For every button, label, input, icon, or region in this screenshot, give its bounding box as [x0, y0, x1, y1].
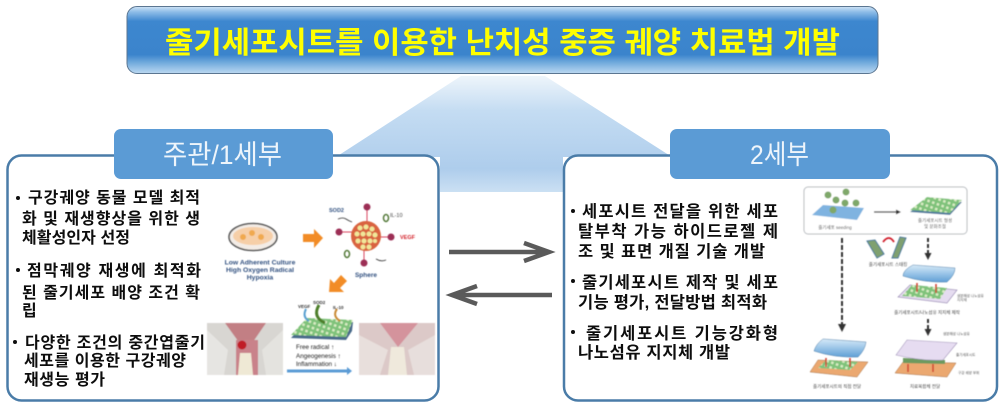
icon: stem cell sheet with factors: IL-10 [333, 305, 344, 310]
arrow: 1세부 to 2세부 [449, 243, 549, 261]
step: seeding to sheet box [804, 187, 967, 234]
step: composite delivery: 줄기세포시트 [956, 352, 976, 357]
label: culture conditions [225, 260, 296, 282]
step: seeding to sheet box: 줄기세포 seeding [818, 224, 852, 231]
step: hydrogel and nanofiber composite: 생분해성 나노섬유 [957, 293, 985, 298]
step: composite delivery [895, 331, 979, 390]
title banner [127, 6, 878, 74]
text block: 2세부 bullets: 세포시트 전달을 위한 세포 [582, 202, 778, 221]
arrow: 2세부 to 1세부 [452, 286, 552, 304]
step: hydrogel and nanofiber composite [894, 265, 985, 316]
step: seeding to sheet box: 및 분화조절 [924, 223, 946, 230]
label: effects: Angeogenesis ↑ [296, 353, 341, 360]
icon: stem cell sheet with factors: SOD2 [313, 300, 326, 305]
step: composite delivery: 구강 궤양 부위 [958, 370, 979, 375]
icon: stem cell sheet with factors [291, 300, 353, 340]
icon: sphere with factors: SOD2 [329, 208, 344, 214]
step: direct delivery: 줄기세포시트의 직접 전달 [813, 383, 861, 390]
text block: 2세부 bullets: 기능 평가, 전달방법 최적화 [578, 293, 767, 312]
icon: sphere with factors: VEGF [400, 235, 416, 241]
icon: sphere with factors: IL-10 [390, 213, 403, 219]
step: composite delivery: 치료복합체 전달 [910, 383, 940, 390]
text block: 2세부 bullets: 탈부착 가능 하이드로젤 제 [578, 222, 778, 241]
arrow: blue healing [287, 367, 352, 375]
arrow: orange to sphere [303, 229, 323, 248]
text block: 2세부 bullets: 줄기세포시트 제작 및 세포 [582, 273, 778, 292]
text block: 1세부 bullets: 세포를 이용한 구강궤양 [24, 352, 186, 370]
text block: 2세부 bullets: 줄기세포시트 기능강화형 [586, 324, 778, 343]
text block: 1세부 bullets: 립 [22, 302, 37, 320]
panel: 2세부 [564, 129, 997, 400]
text block: 1세부 bullets: 재생능 평가 [24, 371, 105, 389]
title banner: 줄기세포시트를 이용한 난치성 중증 궤양 치료법 개발 [165, 27, 840, 60]
tab: 2세부 [670, 129, 890, 179]
text block: 1세부 bullets: 된 줄기세포 배양 조건 확 [22, 284, 200, 302]
tab: 주관/1세부 [114, 129, 333, 179]
label: effects [296, 344, 341, 368]
figure: cell sheet process [804, 187, 985, 390]
label: culture conditions: High Oxygen Radical [226, 267, 294, 274]
text block: 1세부 bullets: 점막궤양 재생에 최적화 [27, 262, 201, 280]
step: composite delivery: 생분해성 나노섬유 [943, 331, 971, 336]
tab: 2세부: 2세부 [750, 140, 809, 170]
text block: 2세부 bullets: 나노섬유 지지체 개발 [578, 343, 730, 362]
figure: sphere culture to cell sheet [207, 204, 435, 375]
arrow: dashed right route [924, 238, 932, 336]
label: effects: Free radical ↑ [296, 344, 334, 351]
text block: 2세부 bullets [571, 202, 778, 362]
step: sheet stacking: 줄기세포시트 스태킹 [869, 261, 907, 268]
tab: 주관/1세부: 주관/1세부 [163, 140, 282, 170]
text block: 1세부 bullets: 체활성인자 선정 [22, 229, 130, 247]
panel: 주관/1세부 [8, 129, 438, 400]
icon: sphere with factors: Sphere [355, 272, 377, 279]
step: seeding to sheet box: 줄기세포시트 형성 [918, 217, 952, 224]
icon: culture dish [229, 224, 277, 250]
step: direct delivery [810, 339, 868, 390]
text block: 1세부 bullets: 구강궤양 동물 모델 최적 [28, 189, 200, 207]
text block: 1세부 bullets: 화 및 재생향상을 위한 생 [22, 210, 200, 228]
photo: ulcer after [359, 323, 435, 375]
text block: 1세부 bullets: 다양한 조건의 중간엽줄기 [25, 334, 205, 352]
photo: ulcer before [207, 323, 283, 375]
label: culture conditions: Low Adherent Culture [225, 260, 296, 266]
text block: 1세부 bullets [13, 189, 205, 389]
step: hydrogel and nanofiber composite: 지지체 [957, 297, 967, 302]
icon: sphere with factors [329, 204, 416, 279]
connector: light blue cone from title to panels [336, 76, 672, 192]
step: hydrogel and nanofiber composite: 줄기세포시트/나노섬유 지지체 제작 [894, 309, 960, 316]
step: sheet stacking [867, 237, 907, 268]
text block: 2세부 bullets: 조 및 표면 개질 기술 개발 [578, 242, 765, 261]
label: culture conditions: Hypoxia [247, 274, 273, 282]
icon: stem cell sheet with factors: VEGF [298, 304, 311, 309]
label: effects: Inflammation ↓ [296, 361, 337, 368]
arrow: dashed left route [838, 238, 846, 332]
arrow: orange to sheet [329, 275, 347, 292]
